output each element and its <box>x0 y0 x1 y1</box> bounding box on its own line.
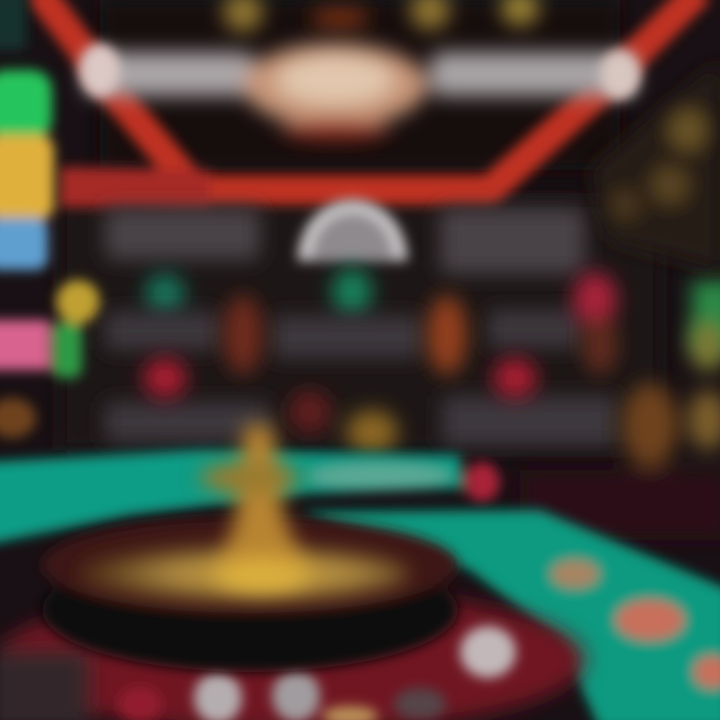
right side warm lights <box>520 60 720 540</box>
ceiling: dark upper area <box>60 0 660 450</box>
grey wall panels, middle and lower rows <box>105 310 617 446</box>
white accent ends of sign band <box>80 44 640 99</box>
roulette spindle <box>200 425 310 590</box>
red and orange lamps <box>143 272 618 454</box>
grey wall panels, top row <box>105 208 585 274</box>
white arc emblem <box>297 200 408 262</box>
roulette wheel body <box>42 517 458 672</box>
ceiling lights <box>223 0 539 32</box>
left colour strip <box>0 0 100 438</box>
bottom chips <box>118 626 516 720</box>
red ceiling frame <box>38 0 700 190</box>
roulette wheel gold bowl <box>80 546 410 602</box>
green lights <box>145 268 720 350</box>
illuminated white sign band <box>85 43 635 140</box>
teal roulette table, far left section <box>0 450 500 545</box>
teal roulette table, right section <box>300 510 720 720</box>
red outer table rim <box>0 588 585 720</box>
